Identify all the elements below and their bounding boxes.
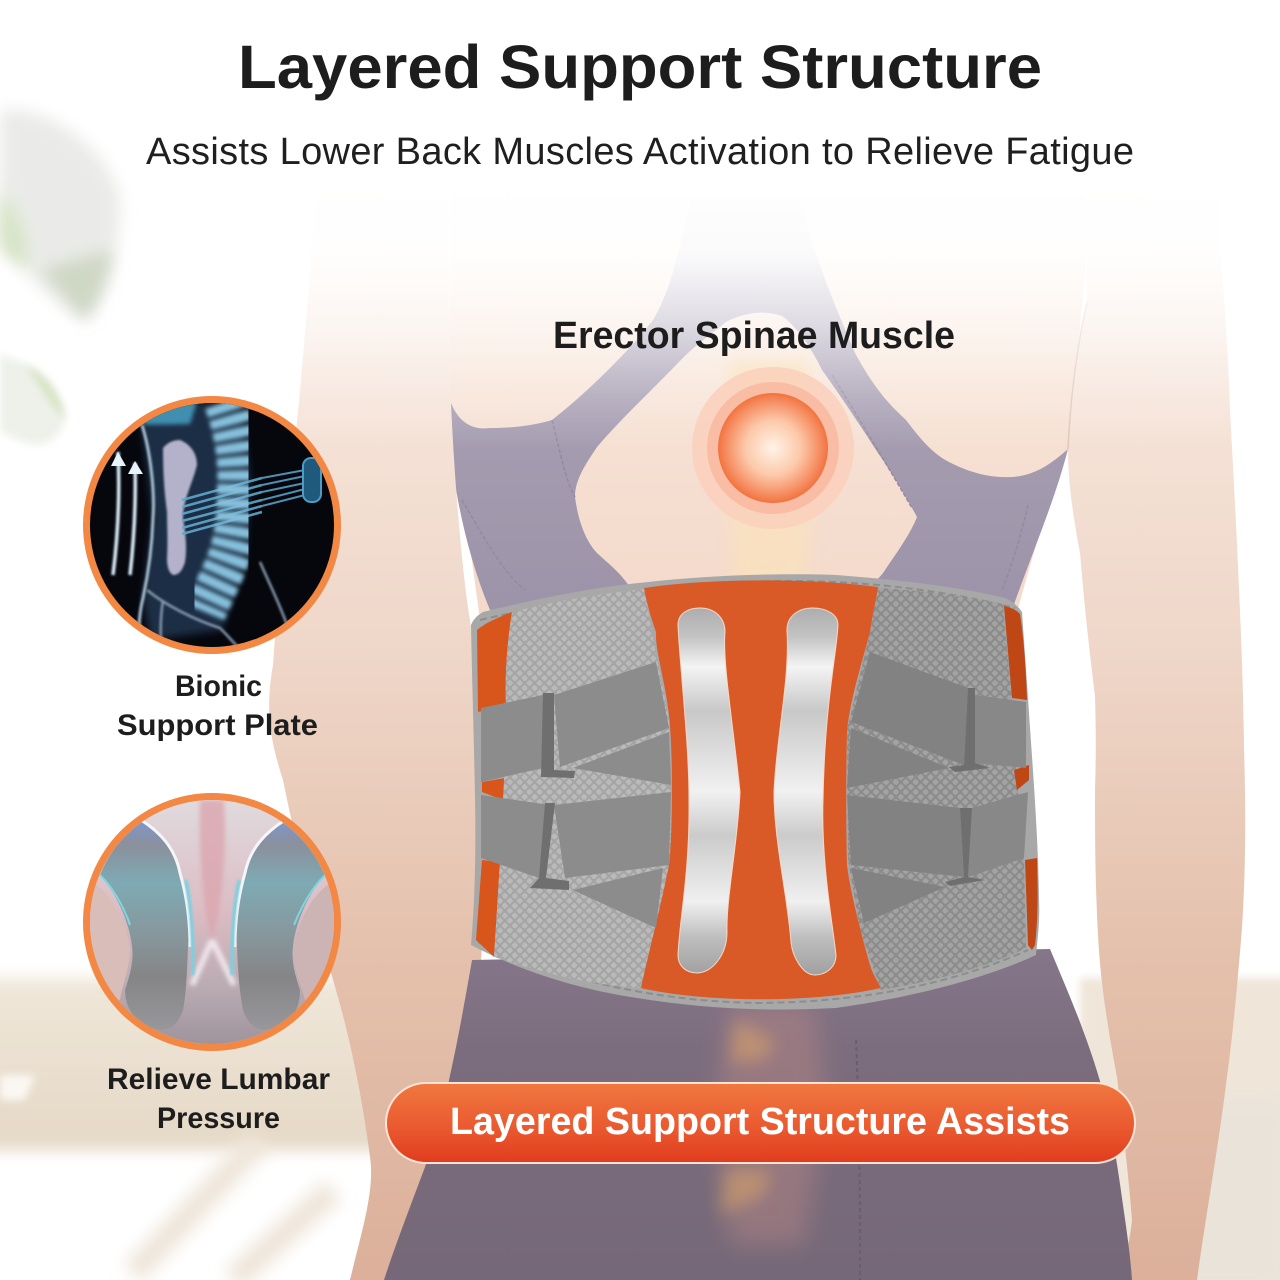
- title: Layered Support Structure: [238, 33, 1042, 101]
- label: bionic support plate: Bionic: [175, 670, 262, 703]
- lumbar support brace: [471, 574, 1039, 1010]
- lower spine bright spots: [720, 1020, 775, 1215]
- central orange panel: [641, 580, 881, 999]
- label: relieve lumbar pressure: Relieve Lumbar: [107, 1063, 330, 1096]
- arm crease: [1068, 303, 1087, 449]
- label: erector spinae muscle: Erector Spinae Muscle: [553, 315, 955, 357]
- left mesh panel: [494, 589, 672, 988]
- top seam lines: [462, 375, 1028, 590]
- sports top: [448, 200, 1068, 610]
- metal support plate left: [678, 608, 740, 973]
- left straps: [481, 662, 671, 928]
- white fade over shoulders: [280, 170, 1280, 450]
- left orange side panels: [476, 612, 512, 957]
- leggings seam: [856, 1040, 860, 1280]
- buckles: [530, 688, 990, 890]
- right orange side panels: [1004, 606, 1038, 950]
- left arm: [269, 190, 490, 1280]
- label: bionic support plate: Support Plate: [117, 709, 318, 742]
- leggings: [384, 949, 1132, 1280]
- panel: relieve lumbar pressure image: [83, 793, 345, 1055]
- figure: woman's back: [269, 170, 1280, 1280]
- metal support plate right: [774, 608, 838, 975]
- right strap ends: [968, 695, 1028, 877]
- torso skin: [450, 190, 1090, 620]
- right mesh panel: [847, 588, 1026, 990]
- label: bionic support plate: [117, 670, 318, 742]
- callout: layered support structure assists: Layered Support Structure Assists: [450, 1101, 1070, 1143]
- right straps: [847, 652, 968, 923]
- brace body: [471, 574, 1039, 1010]
- panel: bionic support plate image: [83, 396, 341, 655]
- subtitle: Assists Lower Back Muscles Activation to Relieve Fatigue: [146, 131, 1134, 173]
- right arm: [1068, 190, 1245, 1280]
- callout: layered support structure assists: [386, 1083, 1135, 1163]
- spine glow target: erector spinae: [692, 367, 854, 529]
- label: relieve lumbar pressure: Pressure: [157, 1102, 280, 1135]
- brace edge stitching: [478, 581, 1028, 1003]
- lower spine glow: [718, 1005, 825, 1245]
- upper spine glow: [730, 362, 808, 590]
- label: relieve lumbar pressure: [107, 1063, 330, 1135]
